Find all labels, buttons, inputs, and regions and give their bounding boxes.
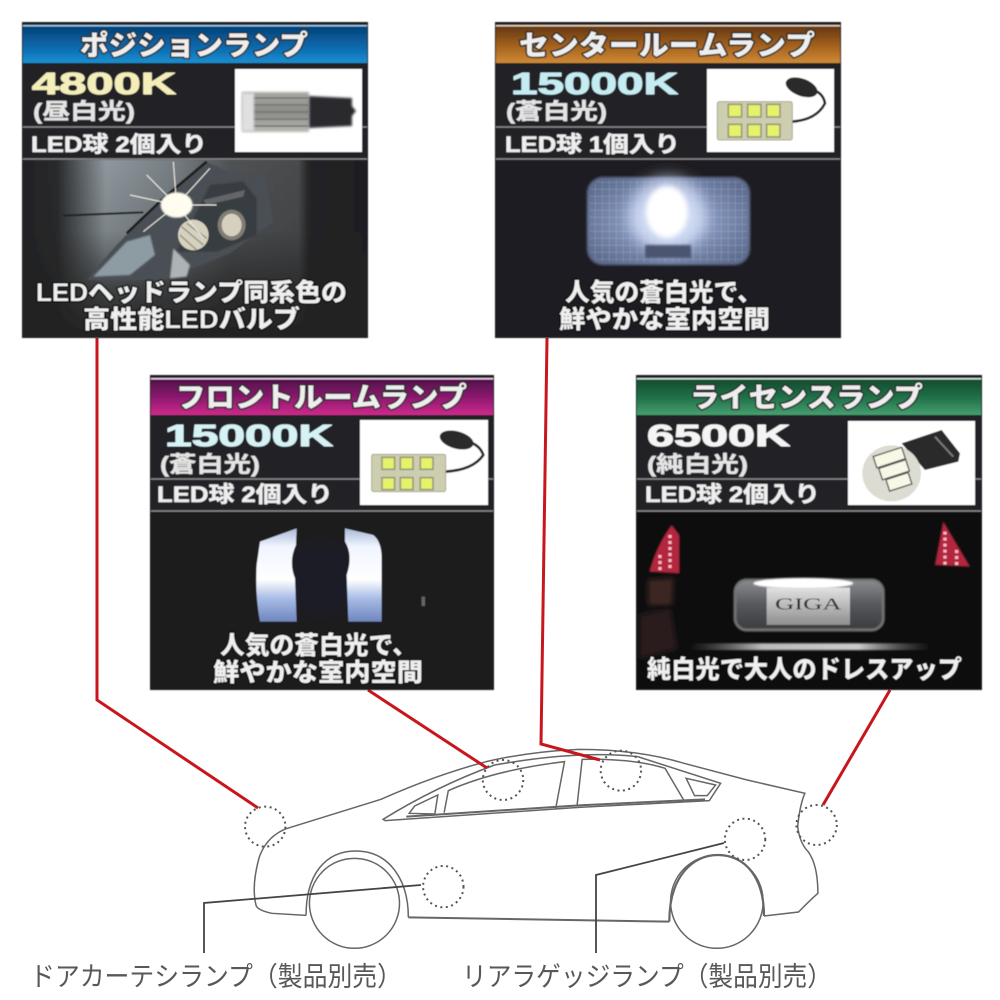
colour name: (蒼白光) bbox=[506, 99, 607, 124]
colour name: (蒼白光) bbox=[160, 452, 260, 477]
panel: license lamp bbox=[636, 375, 982, 690]
heading: フロントルームランプ bbox=[176, 382, 467, 413]
quantity: LED球 1個入り bbox=[505, 132, 680, 157]
front wheel arch bbox=[306, 851, 408, 917]
quarter glass bbox=[409, 778, 716, 814]
caption: LEDヘッドランプ同系色の bbox=[36, 279, 347, 307]
caption: 人気の蒼白光で、 bbox=[565, 278, 762, 307]
caption: 高性能LEDバルブ bbox=[83, 305, 300, 334]
product photo: LED board bbox=[360, 420, 488, 505]
photo: license plate at night: GIGA bbox=[775, 595, 842, 614]
caption bbox=[36, 279, 347, 334]
rear wheel bbox=[671, 855, 763, 948]
red line: position lamp bbox=[97, 338, 258, 808]
divider lines bbox=[496, 127, 840, 159]
caption: 純白光で大人のドレスアップ bbox=[647, 656, 962, 684]
heading: ライセンスランプ bbox=[690, 382, 923, 413]
red line: front room lamp bbox=[368, 690, 487, 768]
red line: center room lamp bbox=[541, 338, 600, 760]
rear wheel arch bbox=[669, 855, 764, 922]
photo: headlamp bbox=[23, 160, 367, 337]
header bar bbox=[637, 378, 981, 415]
label: door courtesy lamp: ドアカーテシランプ（製品別売） bbox=[30, 962, 402, 992]
colour temperature: 15000K bbox=[165, 418, 334, 453]
car outline illustration bbox=[245, 749, 837, 948]
header bar bbox=[23, 25, 367, 63]
red line: license lamp bbox=[823, 690, 890, 805]
header highlight bbox=[23, 25, 367, 26]
product photo: wedge LED bbox=[848, 421, 975, 505]
header highlight bbox=[637, 378, 981, 380]
divider lines bbox=[23, 127, 367, 159]
caption: 鮮やかな室内空間 bbox=[559, 306, 770, 334]
product photo: T10 bulb bbox=[235, 69, 362, 152]
colour name: (昼白光) bbox=[33, 99, 135, 124]
rear door window bbox=[577, 759, 684, 805]
leader line: luggage lamp bbox=[596, 843, 724, 953]
leader line: door courtesy lamp bbox=[204, 885, 421, 953]
header highlight bbox=[151, 378, 493, 380]
caption: 鮮やかな室内空間 bbox=[213, 659, 423, 687]
product photo: LED board bbox=[707, 69, 834, 152]
panel: position lamp bbox=[22, 22, 368, 338]
lamp location circles bbox=[245, 751, 837, 907]
caption bbox=[213, 631, 423, 687]
heading: ポジションランプ bbox=[80, 30, 308, 61]
heading: センタールームランプ bbox=[519, 30, 815, 61]
car body bbox=[254, 749, 818, 916]
front door window bbox=[444, 762, 564, 813]
caption: 人気の蒼白光で、 bbox=[220, 631, 417, 660]
header bar bbox=[151, 378, 493, 415]
header bar bbox=[496, 25, 840, 63]
divider lines bbox=[151, 479, 493, 511]
side window surround bbox=[383, 755, 721, 821]
window sill second line bbox=[406, 799, 705, 817]
photo: room lamp bbox=[496, 160, 840, 337]
label: rear luggage lamp: リアラゲッジランプ（製品別売） bbox=[462, 962, 832, 992]
divider lines bbox=[637, 479, 981, 511]
panel: center room lamp bbox=[495, 22, 841, 338]
caption bbox=[559, 278, 770, 334]
colour temperature: 4800K bbox=[32, 66, 177, 101]
photo: license plate at night bbox=[637, 512, 981, 689]
photo: front room lamps bbox=[151, 512, 493, 689]
header highlight bbox=[496, 25, 840, 26]
quantity: LED球 2個入り bbox=[31, 132, 207, 157]
quantity: LED球 2個入り bbox=[645, 482, 820, 507]
quantity: LED球 2個入り bbox=[157, 482, 333, 507]
front wheel bbox=[309, 858, 400, 948]
colour name: (純白光) bbox=[647, 452, 748, 477]
colour temperature: 6500K bbox=[647, 418, 791, 453]
door sill bbox=[408, 917, 669, 922]
colour temperature: 15000K bbox=[511, 66, 679, 101]
panel: front room lamp bbox=[150, 375, 494, 690]
